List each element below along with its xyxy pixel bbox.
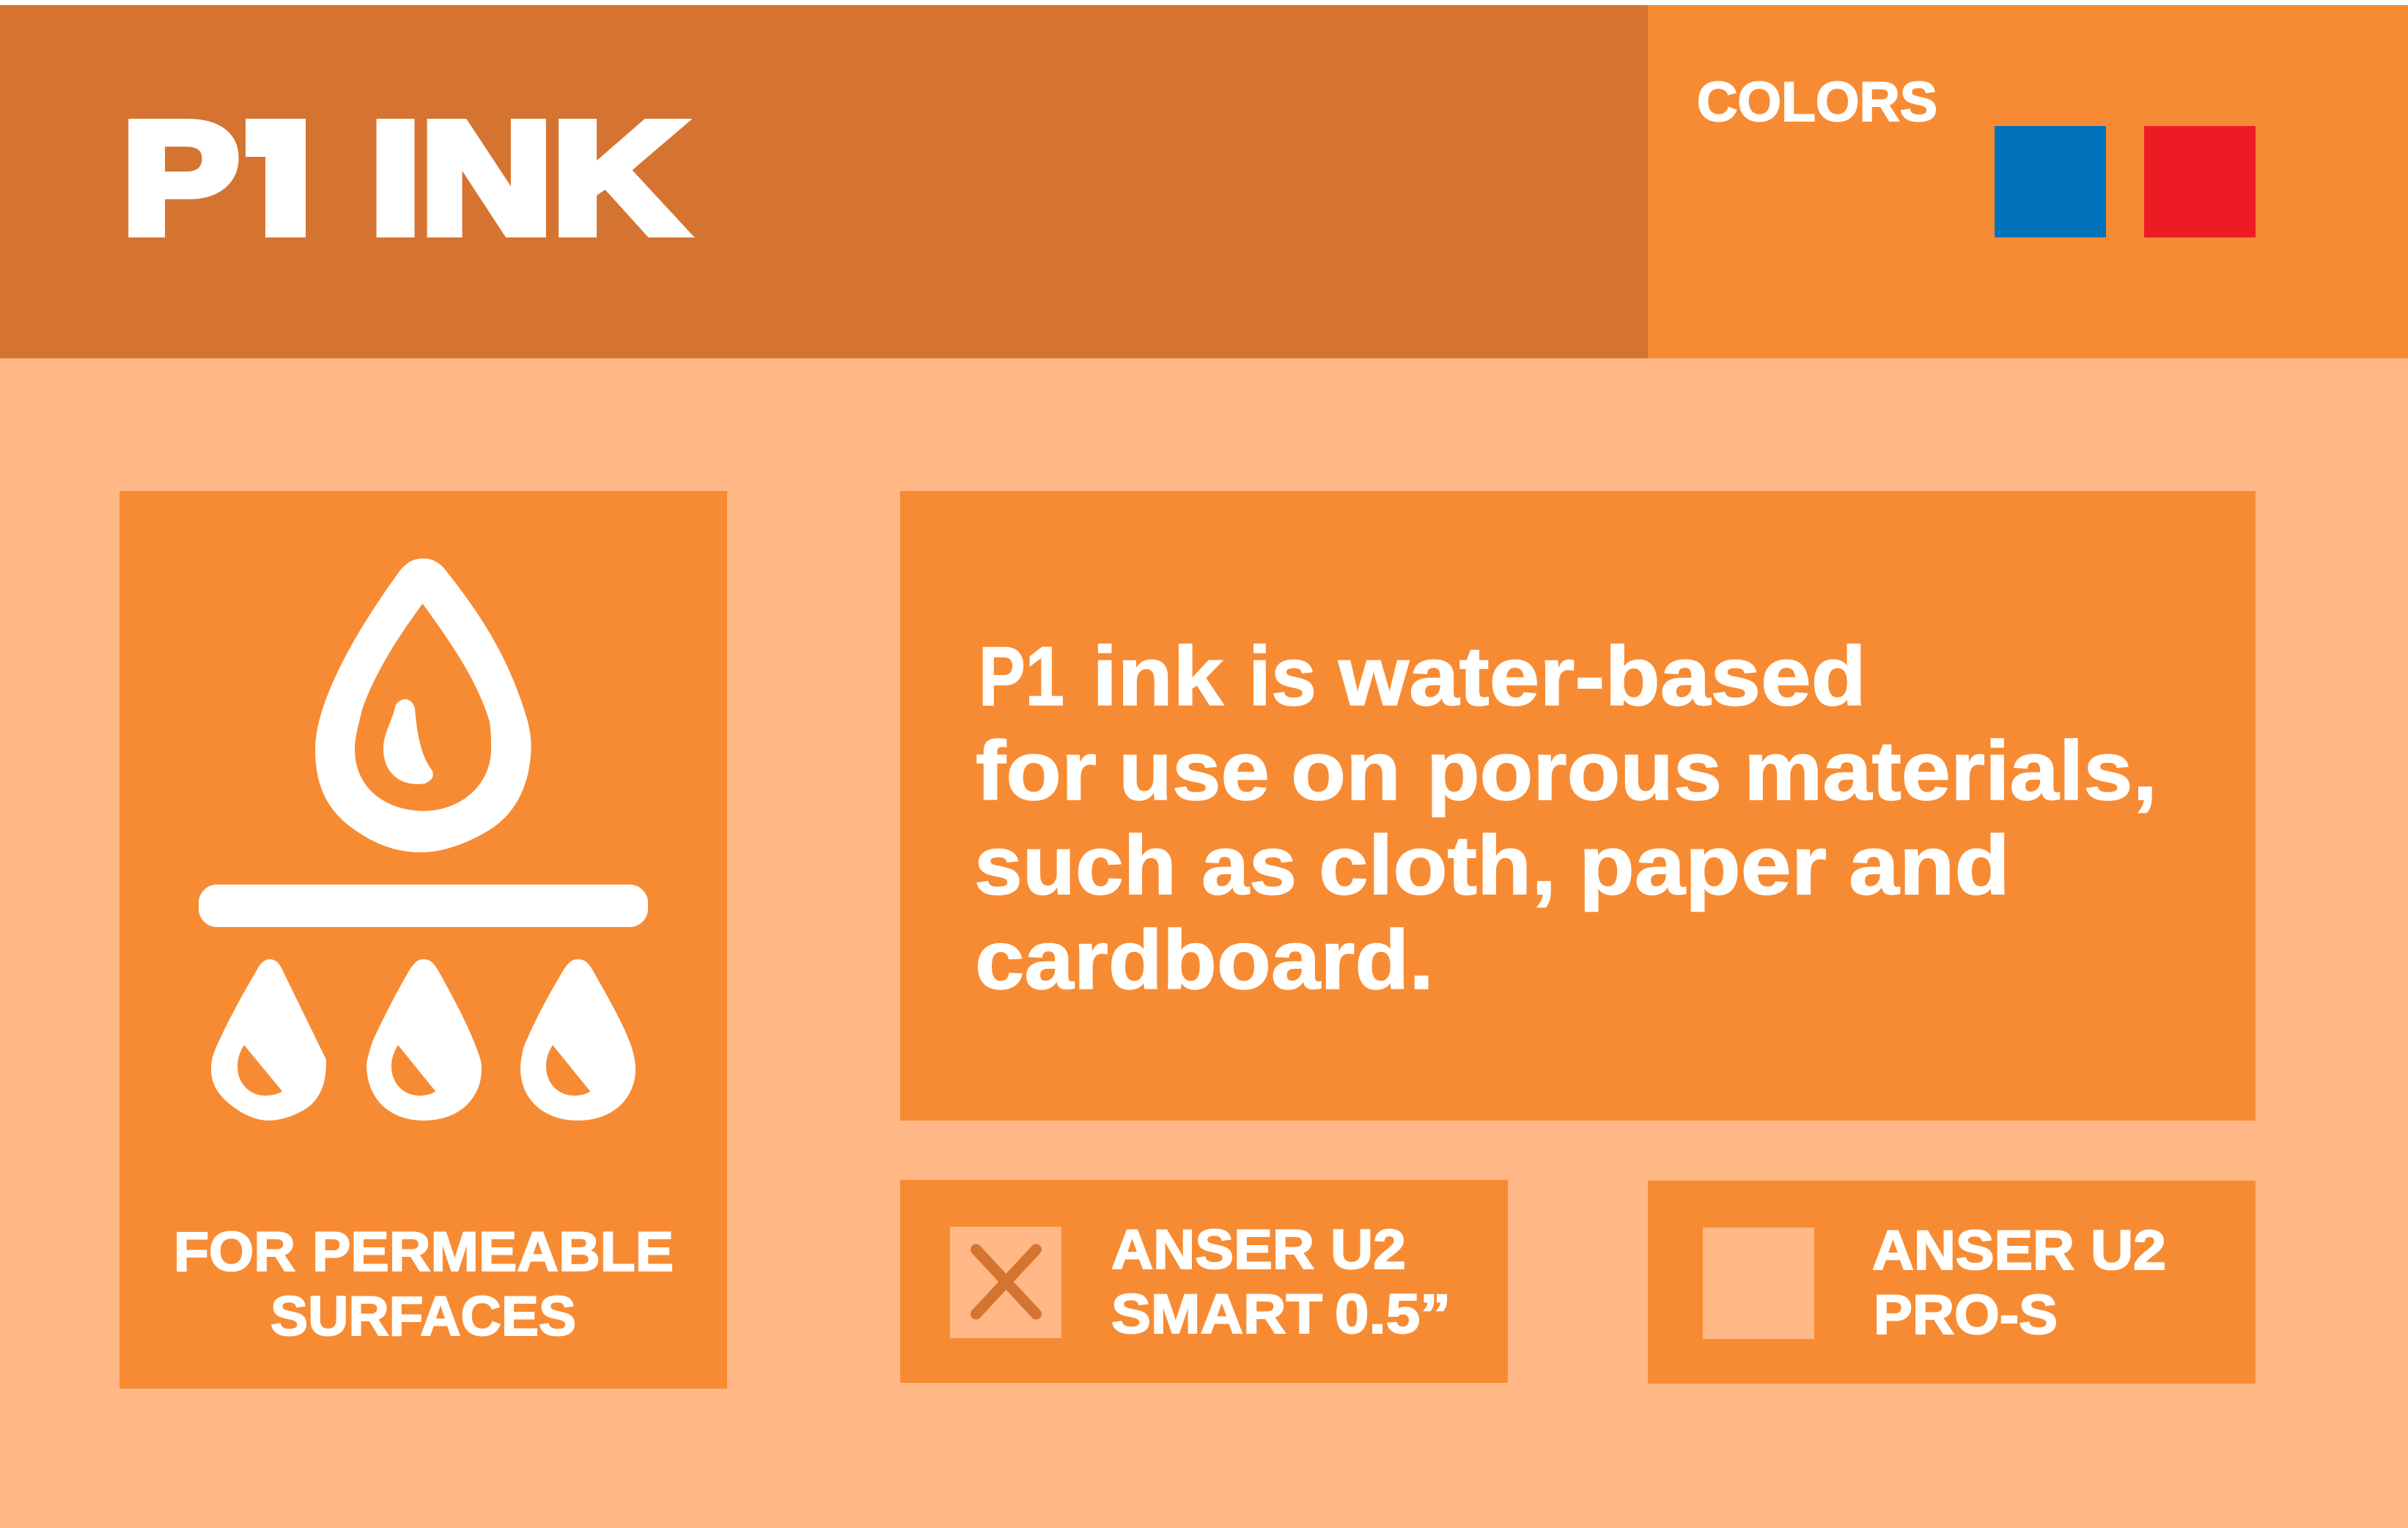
description text: such <box>974 819 1177 912</box>
panel: description <box>900 491 2256 1121</box>
icon: small drop left <box>211 959 326 1121</box>
product name: ANSER <box>1872 1219 2074 1282</box>
permeable surfaces label <box>174 1221 674 1348</box>
description text: and <box>1849 819 2010 912</box>
description text <box>974 630 2157 1007</box>
permeable surfaces label: SURFACES <box>270 1285 576 1348</box>
product name <box>1111 1219 1451 1346</box>
icon: small drop middle <box>367 959 482 1121</box>
header band: colors <box>1648 5 2408 358</box>
colors heading: COLORS <box>1697 71 1937 133</box>
description text: materials, <box>1744 725 2157 818</box>
title: P <box>122 89 239 266</box>
product name: ANSER <box>1111 1219 1314 1281</box>
description text: use <box>1119 725 1270 818</box>
checkbox empty <box>1703 1228 1814 1339</box>
description text: cardboard. <box>975 914 1434 1007</box>
product name: PRO-S <box>1874 1284 2058 1346</box>
description text: paper <box>1579 819 1827 912</box>
description text: as <box>1201 819 1297 912</box>
description text: for <box>976 725 1097 818</box>
swatch: red <box>2144 126 2256 237</box>
title <box>122 89 684 266</box>
description text: on <box>1291 725 1401 818</box>
icon: surface bar <box>199 885 648 927</box>
icon: cross <box>976 1250 1037 1314</box>
description text: is <box>1248 630 1317 723</box>
product name: U2 <box>2091 1219 2166 1282</box>
product name: 0.5” <box>1335 1283 1451 1346</box>
permeable surfaces label: FOR <box>174 1221 295 1283</box>
swatch: blue <box>1995 126 2106 237</box>
panel: Anser U2 Pro-S <box>1648 1181 2256 1384</box>
icon: small drop right <box>520 959 636 1121</box>
description text: cloth, <box>1319 819 1556 912</box>
description text: P1 <box>979 630 1064 723</box>
icon: large ink drop <box>315 558 531 852</box>
product name <box>1872 1219 2166 1346</box>
title: 1 <box>253 89 306 266</box>
panel: Anser U2 Smart 0.5 <box>900 1180 1508 1383</box>
description text: water-based <box>1338 630 1866 723</box>
panel: permeable surfaces <box>119 491 727 1389</box>
description text: ink <box>1092 630 1224 723</box>
product name: U2 <box>1330 1219 1406 1281</box>
permeable surfaces label: PERMEABLE <box>312 1221 674 1283</box>
header band: title <box>0 5 1648 358</box>
title: INK <box>370 89 684 266</box>
product name: SMART <box>1111 1283 1322 1346</box>
description text: porous <box>1426 725 1722 818</box>
checkbox crossed <box>950 1227 1061 1338</box>
